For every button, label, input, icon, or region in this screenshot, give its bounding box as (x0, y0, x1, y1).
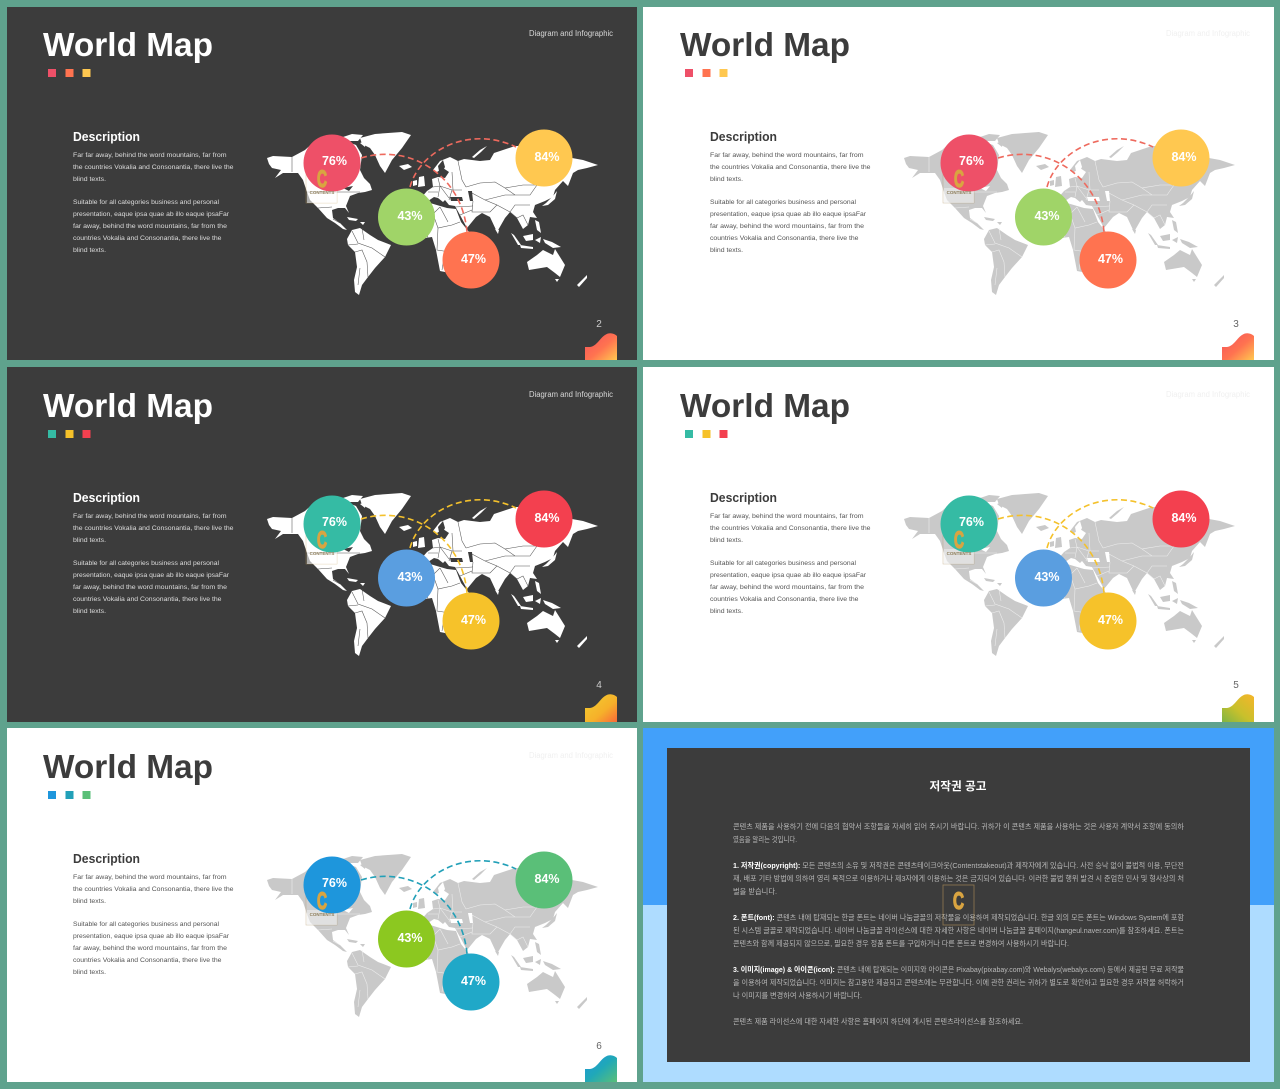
world map (267, 132, 598, 295)
description text block: the countries Vokalia and Consonantia, there live the (710, 525, 871, 532)
description text block: presentation, eaque ipsa quae ab illo eaque ipsaFar (710, 572, 867, 579)
corner shape (585, 333, 617, 360)
data circles: 76% (322, 876, 347, 890)
description text block: Description (73, 130, 140, 144)
data circles: 84% (534, 150, 560, 164)
watermark letter: CONTENTS (310, 551, 334, 556)
notice body text: 2. 폰트(font): 콘텐츠 내에 탑재되는 한글 폰트는 네이버 나눔글꼴의 저작물을 이용하여 제작되었습니다. 한글 외의 모든 폰트는 Windows System에 포함 (733, 912, 1184, 922)
watermark (306, 524, 337, 564)
description text block: Suitable for all categories business and personal (710, 560, 856, 567)
page number: 2 (596, 319, 602, 330)
colour squares (48, 791, 90, 799)
title: World Map (43, 26, 213, 63)
colour squares (48, 69, 90, 77)
data circles: 47% (461, 252, 486, 266)
title: World Map (43, 748, 213, 785)
watermark letter (310, 888, 334, 917)
notice body text: 였음을 알리는 것입니다. (733, 834, 797, 844)
description text block: far away, behind the word mountains, far from the (710, 584, 864, 591)
data circles: 43% (397, 931, 423, 945)
description text block (73, 491, 234, 615)
description text block: far away, behind the word mountains, far from the (73, 945, 227, 952)
watermark: C (953, 888, 964, 915)
page number: 3 (1233, 319, 1239, 330)
description text block: presentation, eaque ipsa quae ab illo eaque ipsaFar (710, 211, 867, 218)
notice body text: 1. 저작권(copyright): 모든 콘텐츠의 소유 및 저작권은 콘텐츠테이크아웃(Contentstakeout)과 제작자에게 있습니다. 사전 승낙 없이 불법적 이용, 무단전 (733, 860, 1184, 870)
notice body text: 벌을 받습니다. (733, 886, 777, 896)
description text block (710, 130, 871, 254)
panel: slide 5 white teal-yellow world map (643, 367, 1274, 722)
watermark letter: C (317, 166, 327, 193)
description text block: blind texts. (73, 969, 106, 976)
dashed arcs (361, 139, 516, 232)
description text block: countries Vokalia and Consonantia, there live the (710, 596, 859, 603)
data circles: 47% (461, 974, 486, 988)
watermark letter: CONTENTS (310, 912, 334, 917)
header label: Diagram and Infographic (529, 390, 613, 399)
data circles: 84% (1171, 150, 1197, 164)
notice body text: 콘텐츠 제품을 사용하기 전에 다음의 협약서 조항들을 자세히 읽어 주시기 바랍니다. 귀하가 이 콘텐츠 제품을 사용하는 것은 사용자 계약서 조항에 동의하 (733, 821, 1184, 831)
title: World Map (43, 387, 213, 424)
description text block (73, 852, 234, 976)
description text block: far away, behind the word mountains, far from the (73, 223, 227, 230)
description text block: presentation, eaque ipsa quae ab illo eaque ipsaFar (73, 572, 230, 579)
watermark letter: CONTENTS (947, 551, 971, 556)
notice body text: 나 이미지를 변경하여 사용하시기 바랍니다. (733, 990, 862, 1000)
watermark letter: CONTENTS (947, 190, 971, 195)
corner shape (1222, 694, 1254, 722)
description text block: far away, behind the word mountains, far from the (710, 223, 864, 230)
world map (267, 493, 598, 656)
header label: Diagram and Infographic (529, 29, 613, 38)
watermark letter: C (317, 888, 327, 915)
data circles (304, 852, 572, 1010)
notice body text: 콘텐츠와 함께 제공되지 않으므로, 필요한 경우 정품 폰트를 구입하거나 다른 폰트로 변경하여 사용하시기 바랍니다. (733, 938, 1069, 948)
watermark (306, 163, 337, 203)
notice body text: 을 이용하여 제작되었습니다. 이미지는 참고용만 제공되고 콘텐츠에는 무관합니다. 이에 관한 권리는 귀하가 별도로 확인하고 필요한 경우 저작물 허락하거 (733, 977, 1184, 987)
description text block: the countries Vokalia and Consonantia, there live the (710, 164, 871, 171)
description text block: Suitable for all categories business and personal (73, 199, 219, 206)
description text block: Description (73, 491, 140, 505)
description text block: blind texts. (73, 898, 106, 905)
corner shape (585, 694, 617, 722)
watermark letter: C (317, 527, 327, 554)
page number: 4 (596, 680, 602, 691)
title: World Map (680, 387, 850, 424)
watermark letter: C (954, 527, 964, 554)
data circles: 84% (534, 872, 560, 886)
watermark (943, 163, 974, 203)
world map (267, 854, 598, 1017)
page number: 6 (596, 1041, 602, 1052)
world map (904, 132, 1235, 295)
data circles (940, 130, 1210, 288)
description text block: the countries Vokalia and Consonantia, there live the (73, 164, 234, 171)
data circles: 76% (322, 515, 347, 529)
description text block: far away, behind the word mountains, far from the (73, 584, 227, 591)
description text block: blind texts. (710, 608, 743, 615)
corner shape (585, 1055, 617, 1082)
data circles: 76% (959, 154, 984, 168)
panel: slide 2 dark red-yellow world map (7, 7, 637, 360)
watermark letter (310, 166, 334, 195)
dashed arcs (361, 500, 516, 593)
description text block: the countries Vokalia and Consonantia, there live the (73, 886, 234, 893)
watermark (943, 885, 974, 925)
page number: 5 (1233, 680, 1239, 691)
colour squares (685, 69, 728, 77)
notice body text (733, 821, 1184, 1026)
description text block: blind texts. (73, 176, 106, 183)
data circles: 43% (1034, 570, 1060, 584)
description text block: blind texts. (710, 537, 743, 544)
panel: slide 4 dark teal-yellow world map (7, 367, 637, 722)
dashed arcs (998, 500, 1153, 593)
description text block: Description (710, 491, 777, 505)
description text block: Suitable for all categories business and personal (710, 199, 856, 206)
colour squares (685, 430, 728, 438)
data circles: 76% (322, 154, 347, 168)
watermark letter: CONTENTS (310, 190, 334, 195)
data circles: 43% (397, 570, 423, 584)
watermark letter (310, 527, 334, 556)
world map (904, 493, 1235, 656)
description text block: blind texts. (710, 247, 743, 254)
watermark letter (947, 527, 971, 556)
description text block: the countries Vokalia and Consonantia, there live the (73, 525, 234, 532)
description text block: presentation, eaque ipsa quae ab illo eaque ipsaFar (73, 211, 230, 218)
data circles: 43% (397, 209, 423, 223)
notice heading: 저작권 공고 (930, 779, 987, 793)
notice body text: 된 시스템 글꼴로 제작되었습니다. 네이버 나눔글꼴 라이선스에 대한 자세한 사항은 네이버 나눔글꼴 홈페이지(hangeul.naver.com)를 참조하세요. 폰트는 (733, 925, 1184, 935)
description text block: blind texts. (73, 608, 106, 615)
data circles (304, 490, 572, 650)
description text block: Far far away, behind the word mountains, far from (73, 874, 227, 881)
dashed arcs (998, 139, 1153, 232)
description text block: Description (710, 130, 777, 144)
data circles: 84% (1171, 511, 1197, 525)
data circles (940, 490, 1210, 650)
description text block: Far far away, behind the word mountains, far from (73, 152, 227, 159)
description text block (73, 130, 234, 254)
notice body text: 콘텐츠 제품 라이선스에 대한 자세한 사항은 홈페이지 하단에 게시된 콘텐츠라이선스를 참조하세요. (733, 1016, 1023, 1026)
data circles: 47% (1098, 252, 1123, 266)
description text block: Description (73, 852, 140, 866)
watermark (943, 524, 974, 564)
description text block: countries Vokalia and Consonantia, there live the (710, 235, 859, 242)
title: World Map (680, 26, 850, 63)
description text block: Suitable for all categories business and personal (73, 921, 219, 928)
description text block: countries Vokalia and Consonantia, there live the (73, 957, 222, 964)
corner shape (1222, 333, 1254, 360)
description text block: Far far away, behind the word mountains, far from (73, 513, 227, 520)
data circles: 43% (1034, 209, 1060, 223)
dashed arcs (361, 861, 516, 954)
description text block: blind texts. (73, 537, 106, 544)
notice body text: 3. 이미지(image) & 아이콘(icon): 콘텐츠 내에 탑재되는 이미지와 아이콘은 Pixabay(pixabay.com)와 Webalys(webalys.com) 등에서 제공된 무료 저작물 (733, 964, 1184, 974)
description text block: presentation, eaque ipsa quae ab illo eaque ipsaFar (73, 933, 230, 940)
description text block: Suitable for all categories business and personal (73, 560, 219, 567)
description text block: countries Vokalia and Consonantia, there live the (73, 235, 222, 242)
description text block: countries Vokalia and Consonantia, there live the (73, 596, 222, 603)
notice body text: 재, 배포 기타 방법에 의하여 영리 목적으로 이용하거나 제3자에게 이용하는 것은 금지되어 있습니다. 이러한 불법 행위 발견 시 준엄한 민사 및 형사상의 처 (733, 873, 1184, 883)
header label: Diagram and Infographic (1166, 390, 1250, 399)
header label: Diagram and Infographic (1166, 29, 1250, 38)
data circles: 47% (461, 613, 486, 627)
data circles: 47% (1098, 613, 1123, 627)
watermark letter: C (954, 166, 964, 193)
description text block: blind texts. (73, 247, 106, 254)
data circles (304, 130, 572, 288)
panel: slide 6 white blue-green world map (7, 728, 637, 1082)
header label: Diagram and Infographic (529, 751, 613, 760)
description text block (710, 491, 871, 615)
watermark (306, 885, 337, 925)
data circles: 84% (534, 511, 560, 525)
description text block: blind texts. (710, 176, 743, 183)
watermark letter (947, 166, 971, 195)
panel: copyright notice (643, 728, 1274, 1082)
panel: slide 3 white red-yellow world map (643, 7, 1274, 360)
colour squares (48, 430, 90, 438)
description text block: Far far away, behind the word mountains, far from (710, 513, 864, 520)
data circles: 76% (959, 515, 984, 529)
description text block: Far far away, behind the word mountains, far from (710, 152, 864, 159)
